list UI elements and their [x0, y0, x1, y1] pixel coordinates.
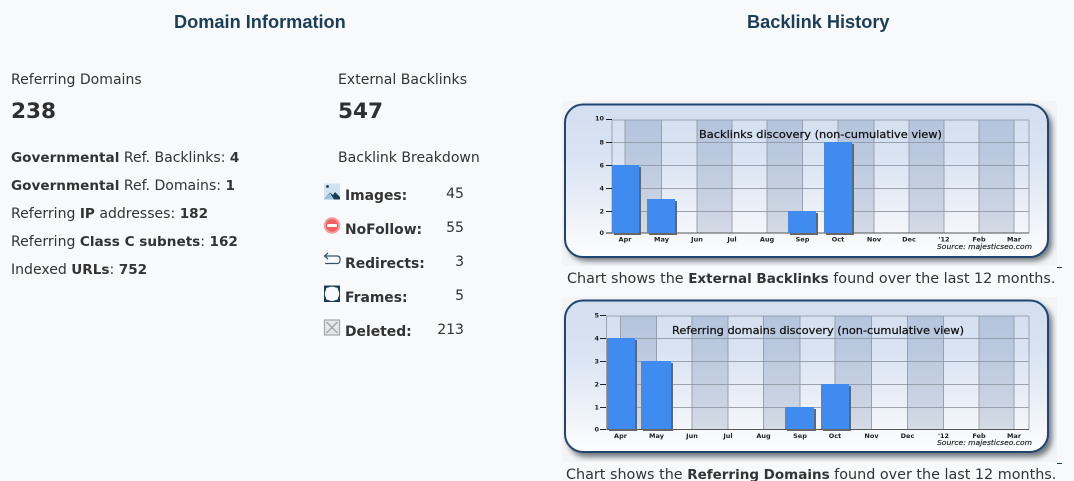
axis labels: May	[654, 236, 670, 244]
axis labels: Feb	[972, 432, 986, 440]
chart title: Backlinks discovery (non-cumulative view)	[699, 128, 942, 141]
axis labels: '12	[938, 432, 949, 440]
stat: class C subnets: Referring Class C subnets: 162	[11, 234, 238, 250]
axis labels: Aug	[756, 432, 771, 440]
stat: indexed URLs: Indexed URLs: 752	[11, 262, 147, 278]
axis labels: Sep	[793, 432, 807, 440]
axis labels: Jul	[722, 432, 733, 440]
axis labels	[594, 312, 1022, 440]
icon: redirect arrow	[324, 252, 341, 264]
axis labels: '12	[938, 236, 950, 244]
axis labels: Dec	[902, 236, 916, 244]
axis labels: Jun	[685, 432, 698, 440]
number: 547: 547	[338, 99, 383, 124]
axis labels: 4	[599, 184, 604, 192]
number: 238: 238	[11, 99, 56, 124]
icon: frame	[324, 286, 340, 302]
chart: referring domains discovery	[562, 298, 1057, 462]
stat list: domain details	[11, 150, 239, 278]
axis labels: 8	[599, 138, 604, 146]
icon: image	[324, 184, 340, 200]
axis labels: 4	[594, 334, 599, 342]
axis labels	[595, 114, 1022, 244]
value: NoFollow 55: 55	[446, 220, 464, 236]
icon: deleted	[324, 319, 340, 336]
axis labels: Sep	[796, 236, 810, 244]
bars	[607, 338, 851, 431]
axis labels: 2	[599, 208, 604, 216]
axis labels: 6	[599, 162, 604, 170]
chart: backlinks discovery: Source: majesticseo.com	[937, 243, 1032, 251]
axis labels: Mar	[1007, 432, 1022, 440]
caption: external backlinks chart: Chart shows the External Backlinks found over the last 12 months.	[567, 271, 1055, 287]
axis labels: 2	[594, 380, 599, 388]
stat: governmental backlinks: Governmental Ref. Backlinks: 4	[11, 150, 239, 166]
heading: Backlink History: Backlink History	[747, 12, 890, 32]
axis labels: Oct	[832, 236, 844, 244]
stat: governmental domains: Governmental Ref. Domains: 1	[11, 178, 235, 194]
bars	[612, 142, 854, 235]
axis labels: 0	[594, 426, 599, 434]
axis labels: Nov	[864, 432, 879, 440]
value: Images 45: 45	[446, 186, 464, 202]
axis labels: Oct	[829, 432, 841, 440]
axis labels: Dec	[901, 432, 914, 440]
label: Backlink Breakdown: Backlink Breakdown	[338, 150, 480, 166]
chart: backlinks discovery	[562, 102, 1057, 266]
axis labels: Apr	[619, 236, 632, 244]
axis labels: May	[649, 432, 665, 440]
chart: referring domains discovery: Source: majesticseo.com	[937, 439, 1032, 447]
heading: Domain Information: Domain Information	[174, 12, 346, 32]
label: Redirects: Redirects:	[345, 256, 425, 272]
value: Deleted 213: 213	[437, 322, 464, 338]
value: Frames 5: 5	[455, 288, 464, 304]
label: Images: Images:	[345, 188, 407, 204]
axis labels: 5	[594, 312, 599, 320]
value: Redirects 3: 3	[455, 254, 464, 270]
label: External Backlinks: External Backlinks	[338, 72, 467, 88]
axis labels: Jul	[726, 236, 737, 244]
label: Deleted: Deleted:	[345, 324, 412, 340]
axis labels: 3	[594, 358, 599, 366]
axis labels: Mar	[1007, 236, 1022, 244]
axis labels: Jun	[690, 236, 703, 244]
axis labels: 0	[599, 229, 604, 237]
axis labels: 10	[595, 114, 604, 122]
label: NoFollow: NoFollow:	[345, 222, 422, 238]
axis labels: Feb	[972, 236, 986, 244]
axis labels: Apr	[614, 432, 628, 440]
label: Referring Domains: Referring Domains	[11, 72, 142, 88]
axis labels: Nov	[867, 236, 882, 244]
label: Frames: Frames:	[345, 290, 408, 306]
chart title: Referring domains discovery (non-cumulative view)	[672, 324, 964, 337]
axis labels: Aug	[760, 236, 775, 244]
icon: nofollow	[324, 217, 340, 234]
axis labels: 1	[594, 404, 599, 412]
stat: IP addresses: Referring IP addresses: 182	[11, 206, 208, 222]
